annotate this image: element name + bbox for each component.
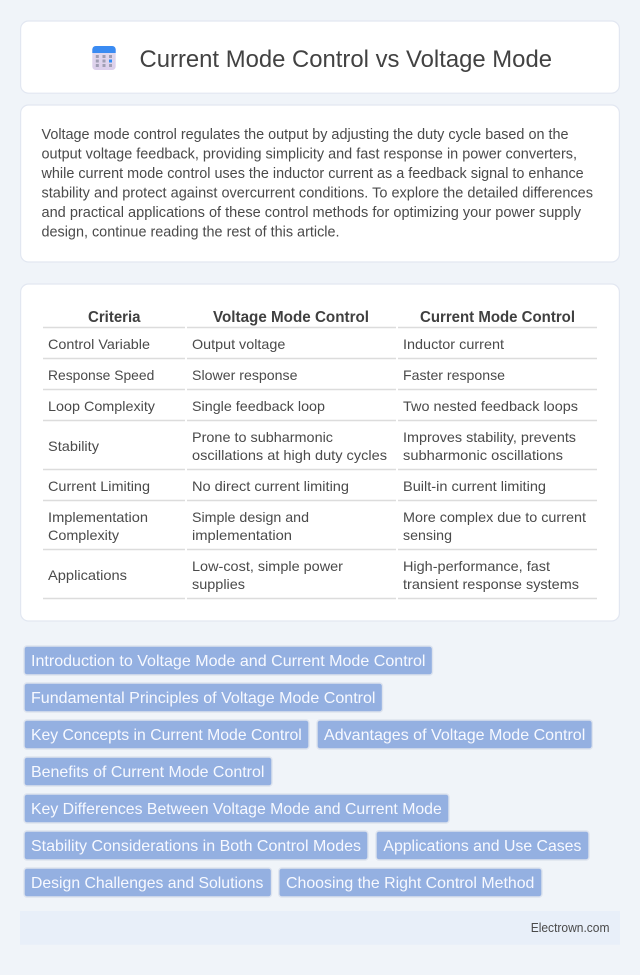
row: applications: Low-cost, simple power xyxy=(192,558,343,574)
row: control variable: Inductor current xyxy=(403,336,504,352)
text block: introduction: design, continue reading the rest of this article. xyxy=(42,224,340,240)
row: stability: oscillations at high duty cycles xyxy=(192,447,387,463)
panel: introduction text xyxy=(21,105,619,262)
tag xyxy=(24,683,382,712)
row: response speed: Slower response xyxy=(192,367,298,383)
row: stability: Improves stability, prevents xyxy=(403,429,576,445)
tag xyxy=(24,757,272,786)
footer xyxy=(20,911,620,945)
text block: introduction: while current mode control uses the inductor current as a feedback signal to enhance xyxy=(41,165,584,182)
tag: Key Differences Between Voltage Mode and Current Mode xyxy=(31,801,442,818)
row: applications: Applications xyxy=(48,567,127,583)
text block: introduction xyxy=(41,126,593,240)
tag: Applications and Use Cases xyxy=(383,838,581,855)
footer credit: Electrown.com xyxy=(531,920,610,935)
tag: Choosing the Right Control Method xyxy=(286,875,534,892)
tag xyxy=(376,831,589,860)
row: current limiting: Current Limiting xyxy=(48,478,150,494)
tag: Fundamental Principles of Voltage Mode Control xyxy=(31,690,376,707)
panel: comparison table xyxy=(21,284,619,621)
row: stability: subharmonic oscillations xyxy=(403,447,563,463)
row: stability: Prone to subharmonic xyxy=(192,429,333,445)
tag xyxy=(24,831,368,860)
tag xyxy=(24,646,432,675)
icon: calendar xyxy=(92,46,116,70)
row: loop complexity: Single feedback loop xyxy=(192,398,325,414)
tag: Key Concepts in Current Mode Control xyxy=(31,727,302,744)
text block: introduction: Voltage mode control regulates the output by adjusting the duty cycle based on the xyxy=(42,126,568,143)
row: implementation complexity: Implementation xyxy=(48,509,148,525)
tag: Stability Considerations in Both Control Modes xyxy=(31,838,361,855)
row: loop complexity xyxy=(48,398,578,414)
row: implementation complexity: Simple design and xyxy=(192,509,309,525)
row: response speed: Response Speed xyxy=(48,367,154,383)
table header row xyxy=(88,309,575,326)
row: control variable: Output voltage xyxy=(192,336,286,352)
row: applications xyxy=(48,558,579,592)
row: current limiting: Built-in current limiting xyxy=(403,478,546,494)
row: applications: High-performance, fast xyxy=(403,558,550,574)
tag: Benefits of Current Mode Control xyxy=(31,764,264,781)
row: stability: Stability xyxy=(48,438,99,454)
title: Current Mode Control vs Voltage Mode xyxy=(140,46,552,73)
tag xyxy=(24,794,449,823)
row: current limiting: No direct current limiting xyxy=(192,478,349,494)
row: implementation complexity: sensing xyxy=(403,527,452,543)
row: loop complexity: Loop Complexity xyxy=(48,398,155,414)
tag xyxy=(24,720,309,749)
tag xyxy=(24,868,272,897)
row: stability xyxy=(48,429,576,463)
row: response speed xyxy=(48,367,505,383)
text block: introduction: output voltage feedback, providing simplicity and fast response in power converters, xyxy=(42,146,577,162)
row: applications: transient response systems xyxy=(403,576,579,592)
tag: Introduction to Voltage Mode and Current Mode Control xyxy=(31,653,426,670)
row: implementation complexity xyxy=(48,509,586,543)
text block: introduction: and practical applications of these control methods for optimizing your power supply xyxy=(42,204,581,221)
row: response speed: Faster response xyxy=(403,367,505,383)
table header row: Voltage Mode Control xyxy=(213,309,369,326)
table header row: Criteria xyxy=(88,309,141,326)
row: current limiting xyxy=(48,478,546,494)
tag: Design Challenges and Solutions xyxy=(31,875,263,892)
row: applications: supplies xyxy=(192,576,245,592)
row: implementation complexity: More complex due to current xyxy=(403,509,586,525)
panel: header xyxy=(21,21,619,93)
table header row: Current Mode Control xyxy=(420,309,575,326)
row: implementation complexity: implementation xyxy=(192,527,292,543)
panel: topic tags xyxy=(24,646,592,897)
row: control variable: Control Variable xyxy=(48,336,150,352)
row: control variable xyxy=(48,336,504,352)
tag: Advantages of Voltage Mode Control xyxy=(324,727,585,744)
text block: introduction: stability and protect against overcurrent conditions. To explore the detailed differences xyxy=(42,184,593,202)
row: implementation complexity: Complexity xyxy=(48,527,119,543)
row: loop complexity: Two nested feedback loops xyxy=(403,398,578,414)
tag xyxy=(279,868,542,897)
tag xyxy=(317,720,592,749)
